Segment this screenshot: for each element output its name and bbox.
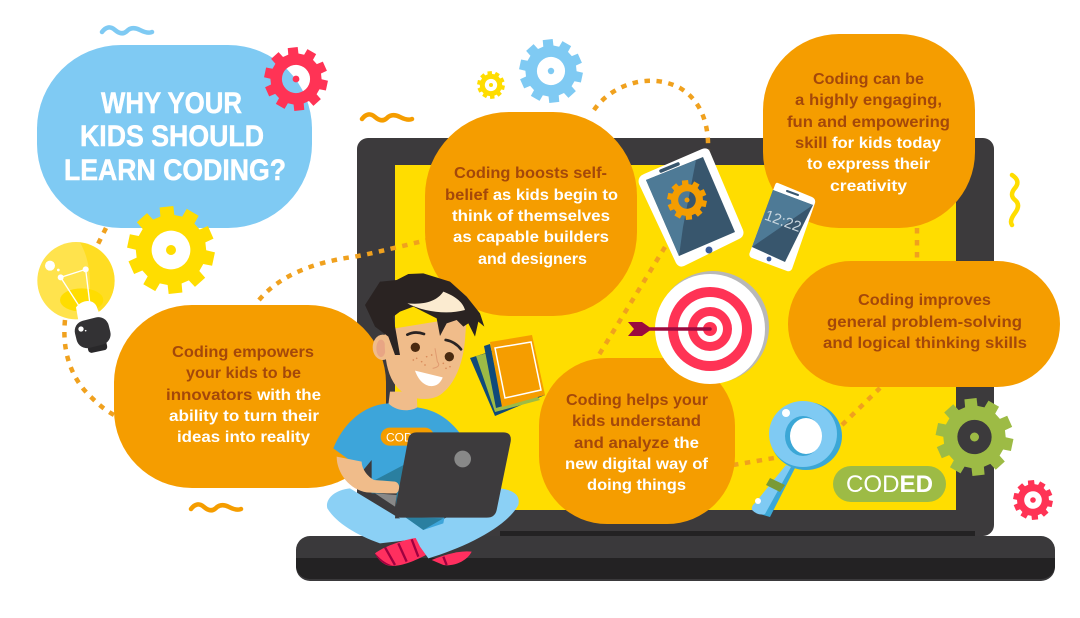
logo: CODED: CODED <box>846 471 933 498</box>
text: problem solving: general problem-solving <box>827 314 1022 331</box>
icon: small red gear <box>1010 477 1056 523</box>
illustration: boy with laptop <box>327 273 519 566</box>
shirt: CODED <box>386 431 430 445</box>
text: engaging skill: skill for kids today <box>795 135 941 152</box>
text: engaging skill: creativity <box>830 178 907 195</box>
icon: smartphone <box>749 183 815 271</box>
squiggle: orange bottom <box>191 504 241 510</box>
icon: books <box>470 335 545 416</box>
text: digital understanding: and analyze the <box>574 435 699 452</box>
title <box>64 87 286 187</box>
neck <box>388 392 417 412</box>
icon: tablet <box>639 148 744 267</box>
text: engaging skill: to express their <box>807 156 930 173</box>
text: innovators: ideas into reality <box>177 429 310 446</box>
text: self-belief: as capable builders <box>453 229 609 246</box>
panel: problem solving <box>788 261 1060 387</box>
icon: small yellow gear <box>475 69 507 101</box>
squiggle: yellow <box>1011 175 1018 225</box>
text: engaging skill: fun and empowering <box>787 114 950 131</box>
icon: yellow gear <box>119 198 223 302</box>
text: digital understanding <box>565 392 709 494</box>
text: problem solving: Coding improves <box>858 292 991 309</box>
text: innovators: Coding empowers <box>172 344 314 361</box>
icon: red gear top <box>259 42 333 116</box>
text: self-belief: Coding boosts self- <box>454 165 607 182</box>
logo: CODED <box>833 466 946 502</box>
text: digital understanding: new digital way of <box>565 456 709 473</box>
arm <box>337 457 399 494</box>
icon: target with arrow <box>628 271 769 384</box>
text: self-belief <box>445 165 618 268</box>
text: engaging skill: Coding can be <box>813 71 924 88</box>
text: self-belief: and designers <box>478 251 587 268</box>
dashed connector lines <box>64 81 917 465</box>
panel: innovators <box>114 305 386 488</box>
text: innovators <box>166 344 321 446</box>
text: digital understanding: doing things <box>587 477 686 494</box>
text: digital understanding: kids understand <box>572 413 701 430</box>
text: digital understanding: Coding helps your <box>566 392 708 409</box>
text: problem solving: and logical thinking skills <box>823 335 1027 352</box>
icon: green gear <box>929 391 1020 483</box>
panel: engaging skill <box>763 34 975 228</box>
title: KIDS SHOULD <box>80 120 264 153</box>
shirt <box>333 403 460 530</box>
text: innovators: your kids to be <box>186 365 301 382</box>
panel: digital understanding <box>539 358 735 524</box>
text: innovators: ability to turn their <box>169 408 319 425</box>
right leg <box>415 488 519 558</box>
socks <box>375 538 472 566</box>
head <box>365 273 484 399</box>
text: self-belief: belief as kids begin to <box>445 187 618 204</box>
title: LEARN CODING? <box>64 154 286 187</box>
panel: self-belief <box>425 112 637 316</box>
text: engaging skill <box>787 71 950 195</box>
text: problem solving <box>823 292 1027 352</box>
icon: magnifying glass <box>752 401 842 517</box>
squiggle: blue <box>102 27 152 33</box>
icon: blue gear <box>514 34 588 108</box>
text: engaging skill: a highly engaging, <box>795 92 942 109</box>
laptop <box>368 432 511 518</box>
text: self-belief: think of themselves <box>452 208 610 225</box>
text: innovators: innovators with the <box>166 387 321 404</box>
left leg <box>327 488 440 543</box>
panel: title bubble <box>37 45 312 228</box>
icon: light bulb <box>37 242 115 353</box>
title: WHY YOUR <box>101 87 242 120</box>
squiggle: orange top <box>362 114 412 120</box>
laptop screen and base <box>296 138 1055 581</box>
text: phone clock: 12:22 <box>762 207 803 236</box>
